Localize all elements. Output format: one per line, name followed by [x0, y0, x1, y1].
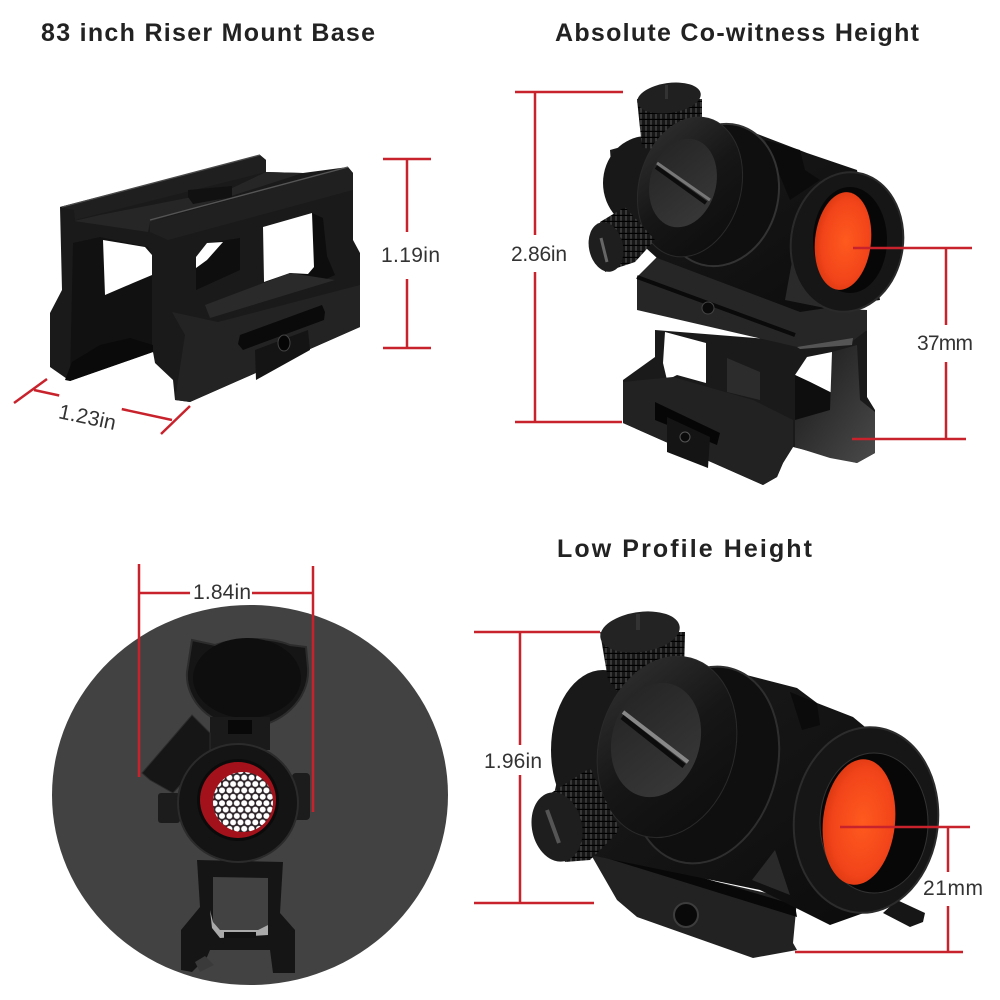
windows of the riser [103, 240, 152, 295]
dimension: 1.84in width: 1.84in [193, 581, 251, 604]
objective lens [782, 165, 912, 319]
dimension: 1.19in height [381, 159, 440, 348]
dimension: 21mm [795, 827, 983, 952]
dimension: 1.23in width [14, 379, 190, 435]
front view sight [142, 638, 310, 973]
co-witness sight on riser [584, 79, 912, 485]
heading: riser mount base: 83 inch Riser Mount Base [41, 19, 375, 47]
heading: absolute co-witness height: Absolute Co-witness Height [555, 19, 920, 47]
elevation turret [600, 632, 685, 695]
objective ring with honeycomb [178, 744, 298, 862]
rear disc [610, 650, 800, 880]
dimension: 2.86in height [511, 92, 623, 422]
dimension: 1.19in height: 1.19in [381, 244, 440, 267]
dimension: 37mm [852, 248, 973, 439]
mount seen from front [181, 860, 295, 973]
heading: low profile height: Low Profile Height [557, 535, 813, 563]
dimension: 1.96in height: 1.96in [484, 750, 542, 773]
base rail [590, 853, 797, 958]
riser front block [623, 377, 793, 485]
dimension: 21mm: 21mm [923, 877, 983, 900]
windage knob [548, 768, 620, 862]
front view disc [52, 605, 448, 985]
dimension: 37mm: 37mm [917, 332, 973, 355]
objective lens [785, 720, 947, 920]
riser mount base product [50, 155, 360, 402]
riser base [623, 330, 875, 485]
windage knob [600, 207, 655, 272]
dimension: 1.23in width: 1.23in [57, 400, 118, 435]
dimension: 2.86in height: 2.86in [511, 243, 567, 266]
dimension: 1.96in height [474, 632, 600, 903]
low profile sight [525, 607, 947, 958]
dimension: 1.84in width [139, 564, 313, 812]
elevation turret [637, 99, 702, 150]
screw [674, 903, 698, 927]
rear disc [645, 110, 795, 280]
optic body [610, 125, 880, 312]
optic housing [555, 670, 905, 925]
